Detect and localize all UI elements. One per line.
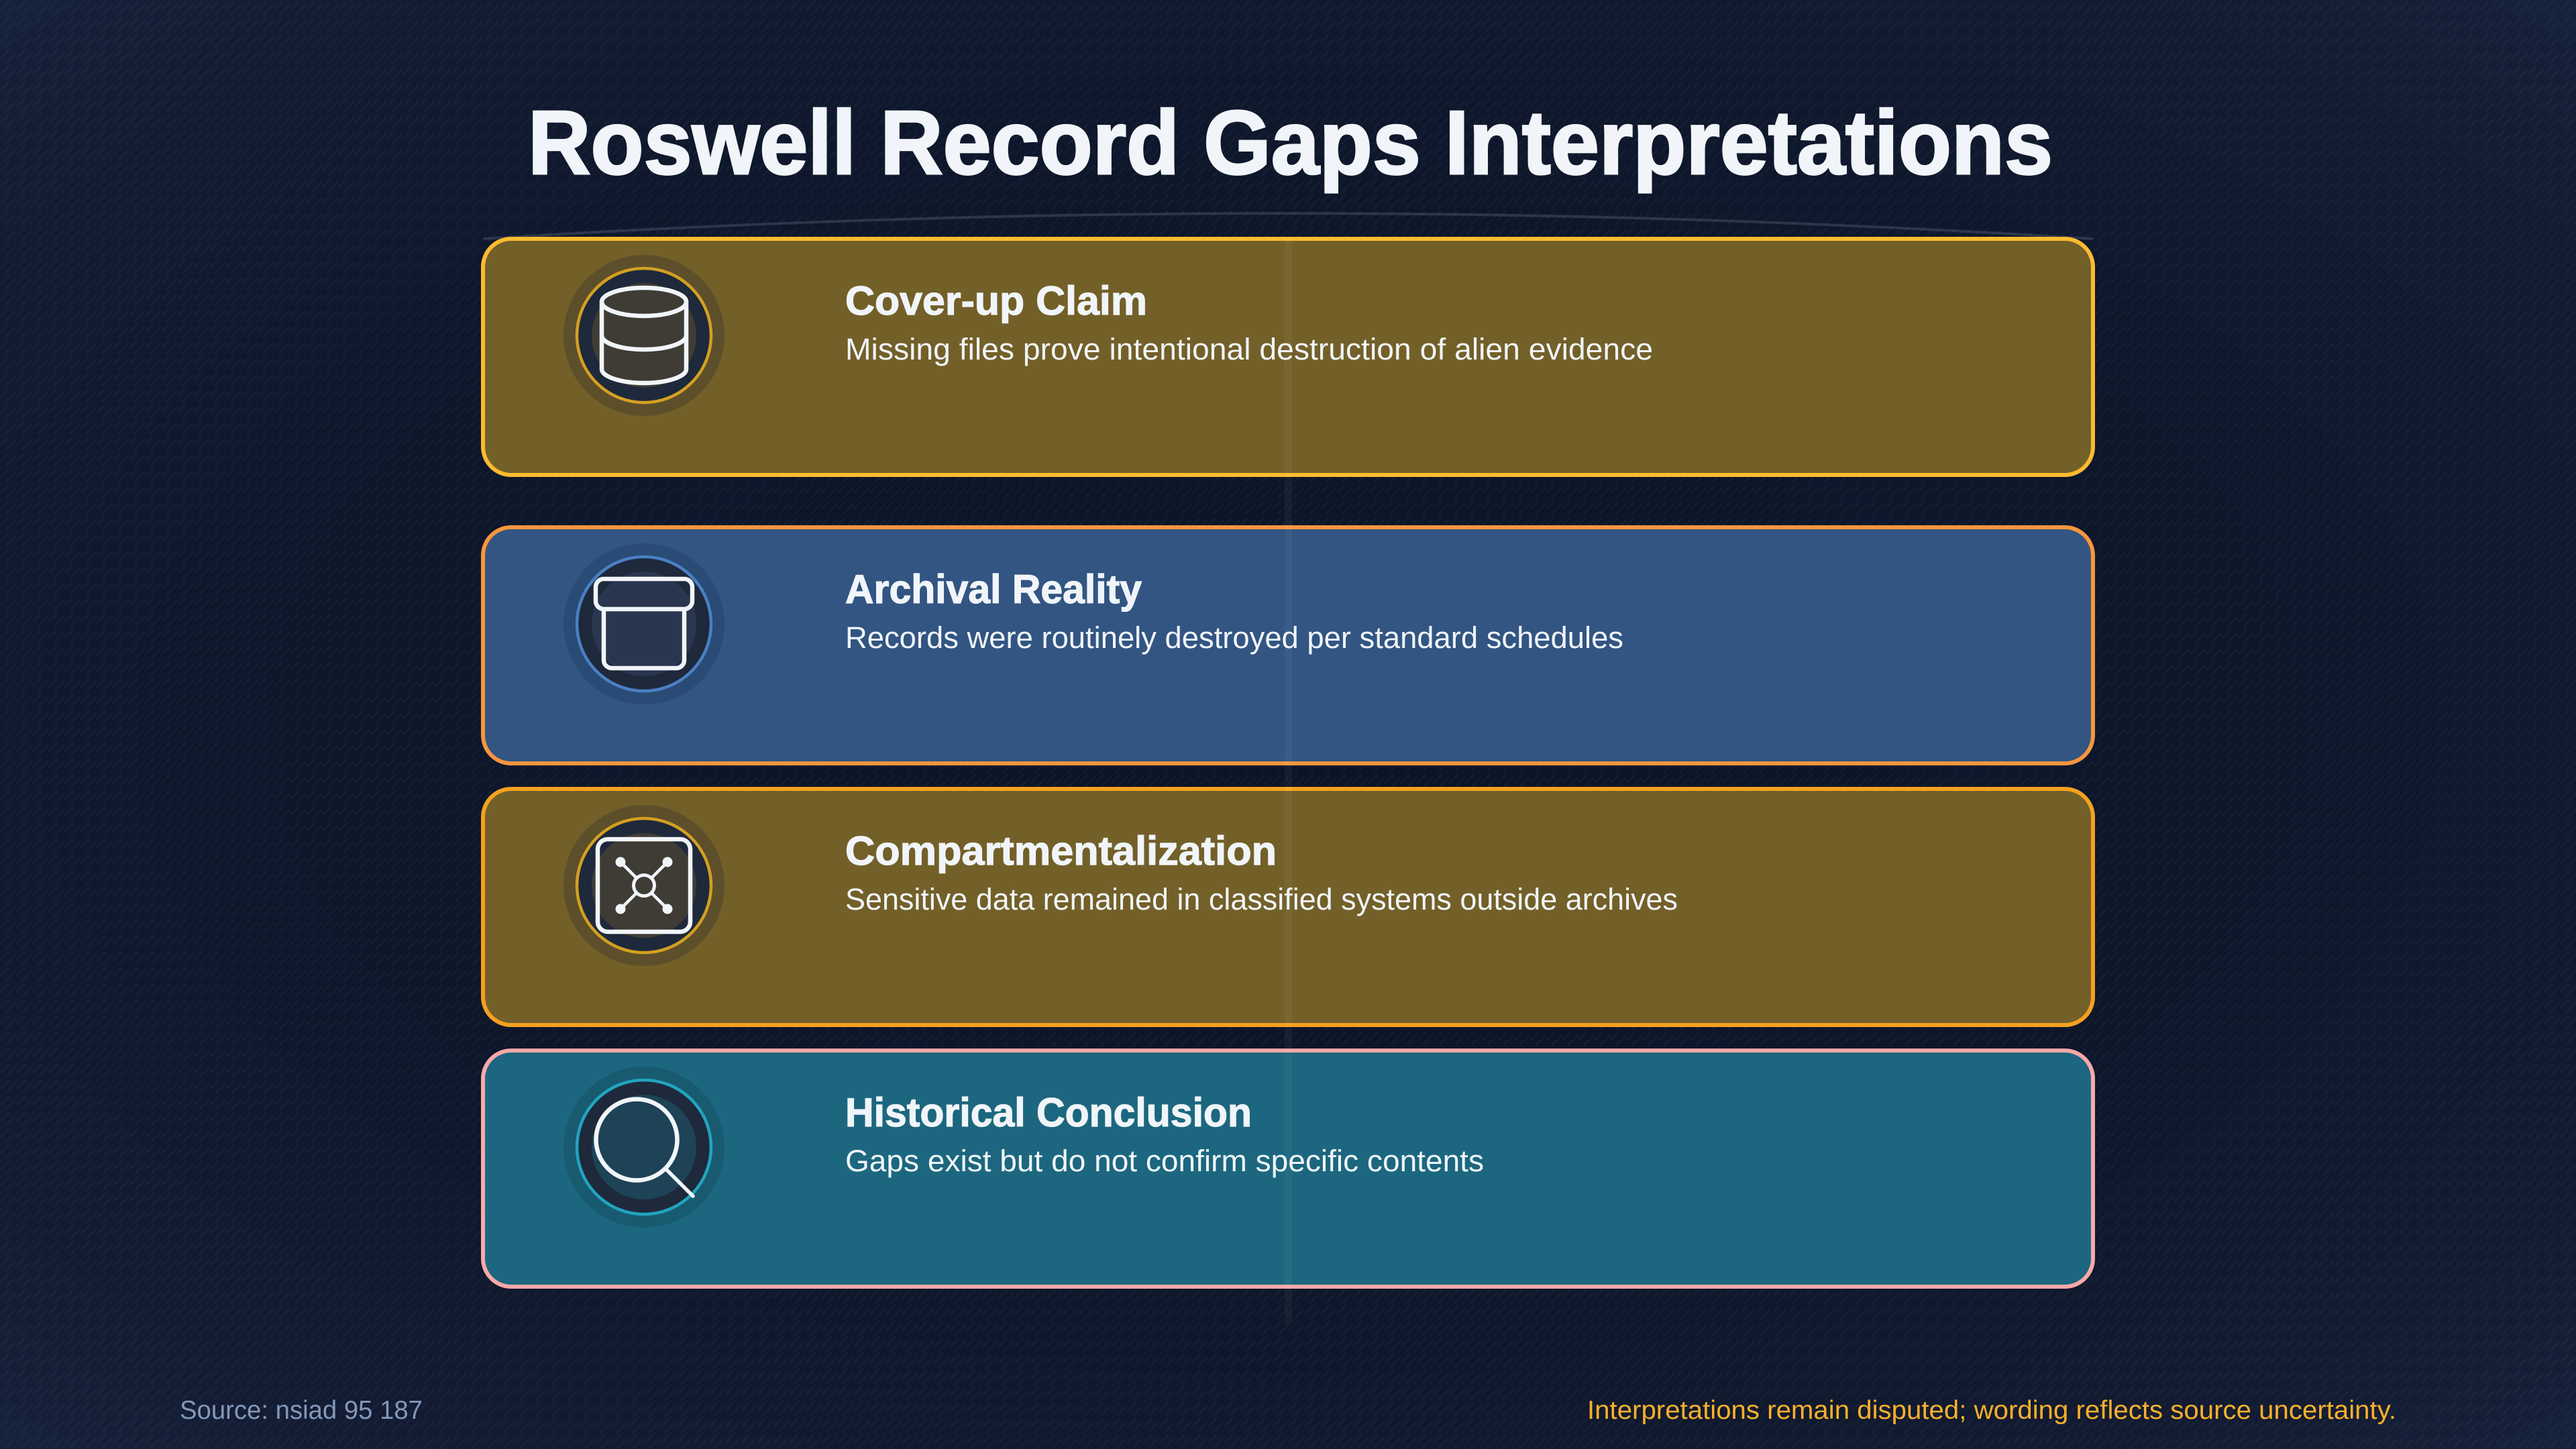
card heading: Cover-up Claim <box>845 278 1147 323</box>
card description: Sensitive data remained in classified systems outside archives <box>845 882 1678 916</box>
panel: Archival Reality <box>483 527 2093 763</box>
card heading: Compartmentalization <box>845 828 1277 873</box>
vertical connector line <box>1285 239 1292 1326</box>
card description: Missing files prove intentional destruction of alien evidence <box>845 332 1653 366</box>
card description: Gaps exist but do not confirm specific contents <box>845 1144 1484 1178</box>
icon: database <box>564 255 724 416</box>
icon: archive box <box>564 543 724 704</box>
card background <box>483 527 2093 763</box>
card description: Records were routinely destroyed per standard schedules <box>845 621 1623 655</box>
card heading: Historical Conclusion <box>845 1090 1252 1135</box>
card background <box>483 789 2093 1025</box>
card background <box>483 1051 2093 1287</box>
panel: Compartmentalization <box>483 789 2093 1025</box>
panel: Cover-up Claim <box>483 239 2093 475</box>
icon: safe with network <box>564 805 724 966</box>
card heading: Archival Reality <box>845 567 1142 612</box>
card background <box>483 239 2093 475</box>
source footnote: Source: nsiad 95 187 <box>180 1396 423 1425</box>
uncertainty note: Interpretations remain disputed; wording reflects source uncertainty. <box>1587 1396 2396 1425</box>
decorative arc above the cards <box>483 213 2093 239</box>
panel: Historical Conclusion <box>483 1051 2093 1287</box>
icon: magnifying glass <box>564 1067 724 1228</box>
title: Roswell Record Gaps Interpretations <box>528 92 2053 193</box>
